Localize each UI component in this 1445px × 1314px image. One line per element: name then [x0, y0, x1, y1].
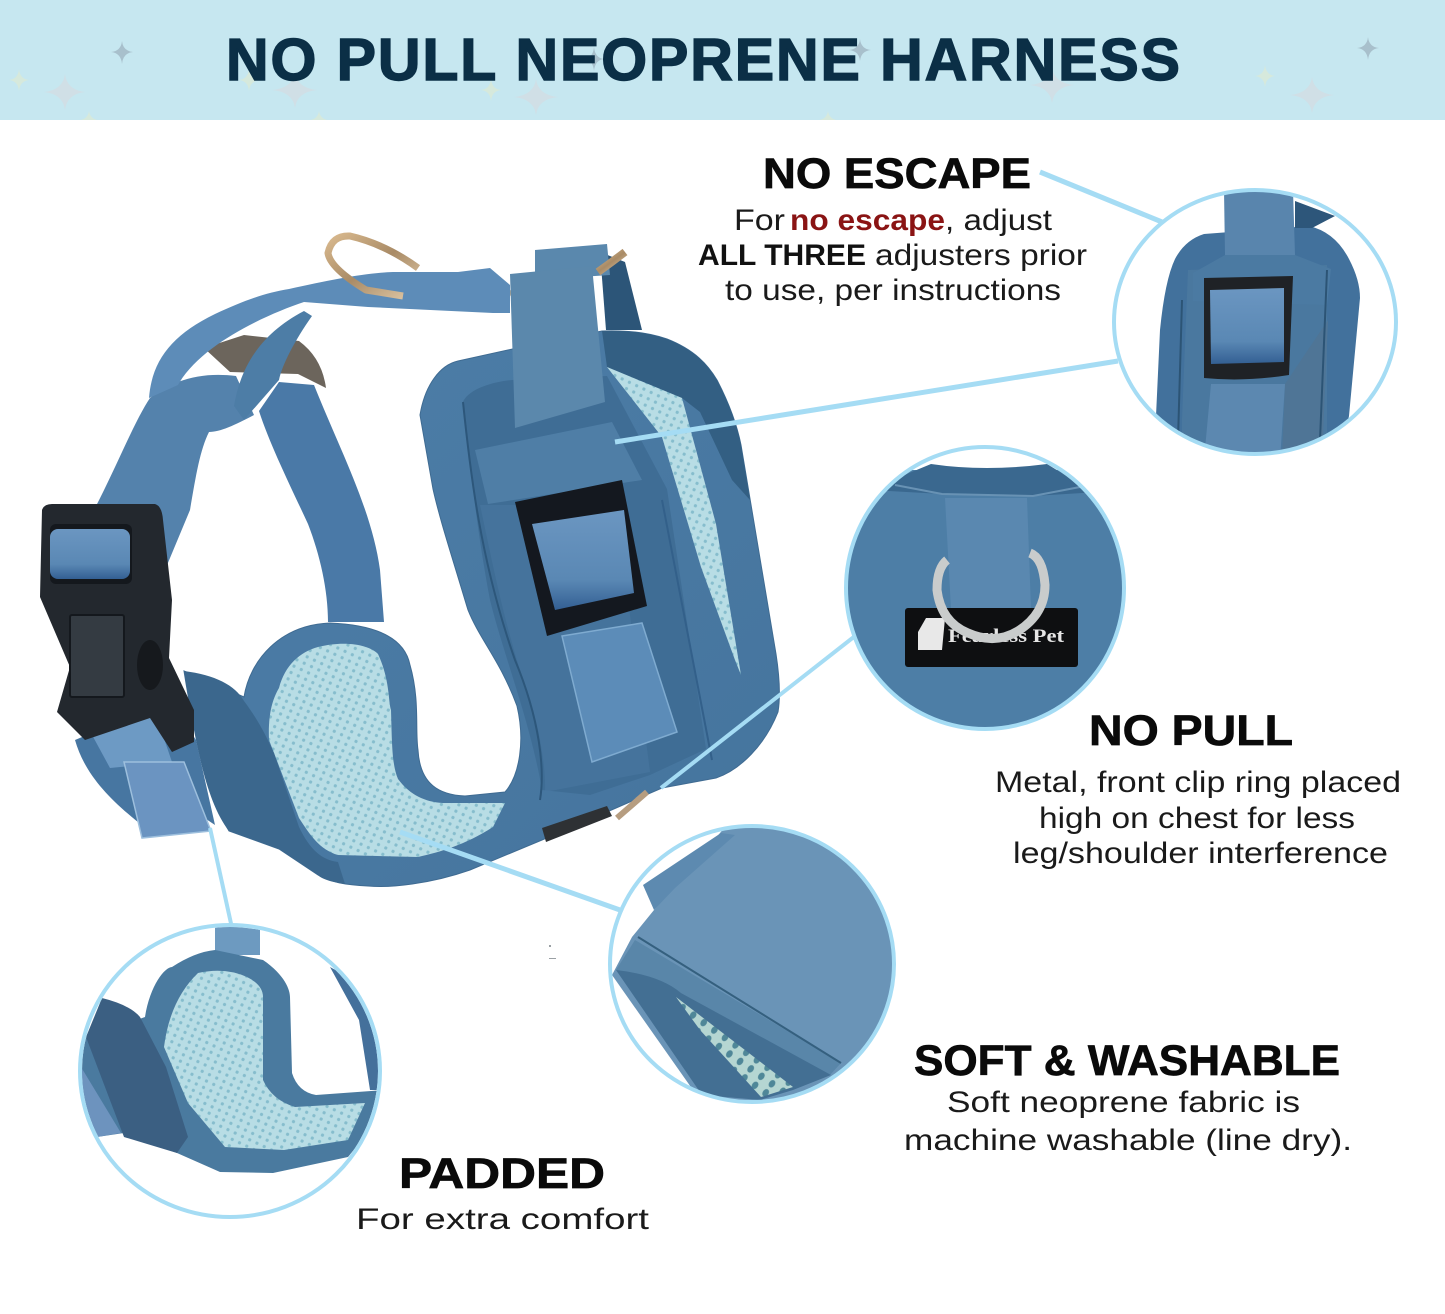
main harness photo illustration [40, 236, 779, 886]
circle: neoprene fabric close-up [610, 820, 900, 1102]
text block: no pull: high on chest for less [1039, 802, 1355, 835]
top D ring [328, 236, 418, 296]
thin upper straps [149, 268, 510, 420]
title: NO PULL NEOPRENE HARNESS [226, 27, 1180, 93]
text block: no escape: to use, per instructions [725, 274, 1061, 307]
text block: no pull [995, 707, 1401, 870]
panel cross strap [475, 422, 642, 504]
bottom clip and chest ring [542, 792, 647, 842]
side release buckle [40, 504, 194, 752]
text block: padded [356, 1150, 650, 1236]
text block: no escape: ALL THREE [698, 239, 866, 272]
circle: padded saddle close-up [80, 925, 390, 1217]
lower velcro tab [562, 623, 677, 762]
left padded band [184, 671, 345, 884]
text block: no pull: Metal, front clip ring placed [995, 766, 1401, 799]
text block: no escape [698, 150, 1087, 307]
panel dark rim [602, 331, 750, 500]
metal slider [204, 335, 326, 388]
text block: soft and washable: SOFT & WASHABLE [914, 1037, 1340, 1085]
text block: no pull: leg/shoulder interference [1013, 837, 1388, 870]
text block: soft and washable [904, 1037, 1352, 1157]
text block: no pull: NO PULL [1089, 707, 1293, 755]
lower left strap and velcro tab [75, 700, 215, 838]
text block: padded: PADDED [399, 1150, 605, 1198]
brand label: Fearless Pet [948, 626, 1065, 647]
callout connector lines [210, 172, 1162, 928]
metal D ring [937, 553, 1045, 639]
slide adjuster buckle [515, 480, 647, 636]
text block: soft and washable: machine washable (line dry). [904, 1124, 1352, 1157]
text block: no escape: For [734, 204, 785, 237]
text block: no escape: , adjust [945, 204, 1053, 237]
header banner [0, 0, 1445, 120]
panel vertical strap [510, 266, 605, 428]
upper left strap [95, 375, 254, 570]
brand label [905, 608, 1078, 667]
text block: no escape: no escape [790, 204, 945, 237]
text block: soft and washable: Soft neoprene fabric is [947, 1086, 1300, 1119]
text block: padded: For extra comfort [356, 1203, 650, 1236]
stray specks [549, 945, 556, 959]
neoprene body [184, 331, 779, 886]
panel inner recess [463, 376, 706, 795]
inner strap [259, 382, 384, 622]
circle: adjuster close-up [1114, 190, 1396, 480]
text block: no escape: adjusters prior [875, 239, 1087, 272]
mesh lining, right [607, 367, 741, 675]
circle: front D-ring close-up [840, 447, 1140, 740]
saddle mesh lining [269, 644, 505, 857]
text block: no escape: NO ESCAPE [763, 150, 1031, 198]
back strap [483, 244, 642, 330]
